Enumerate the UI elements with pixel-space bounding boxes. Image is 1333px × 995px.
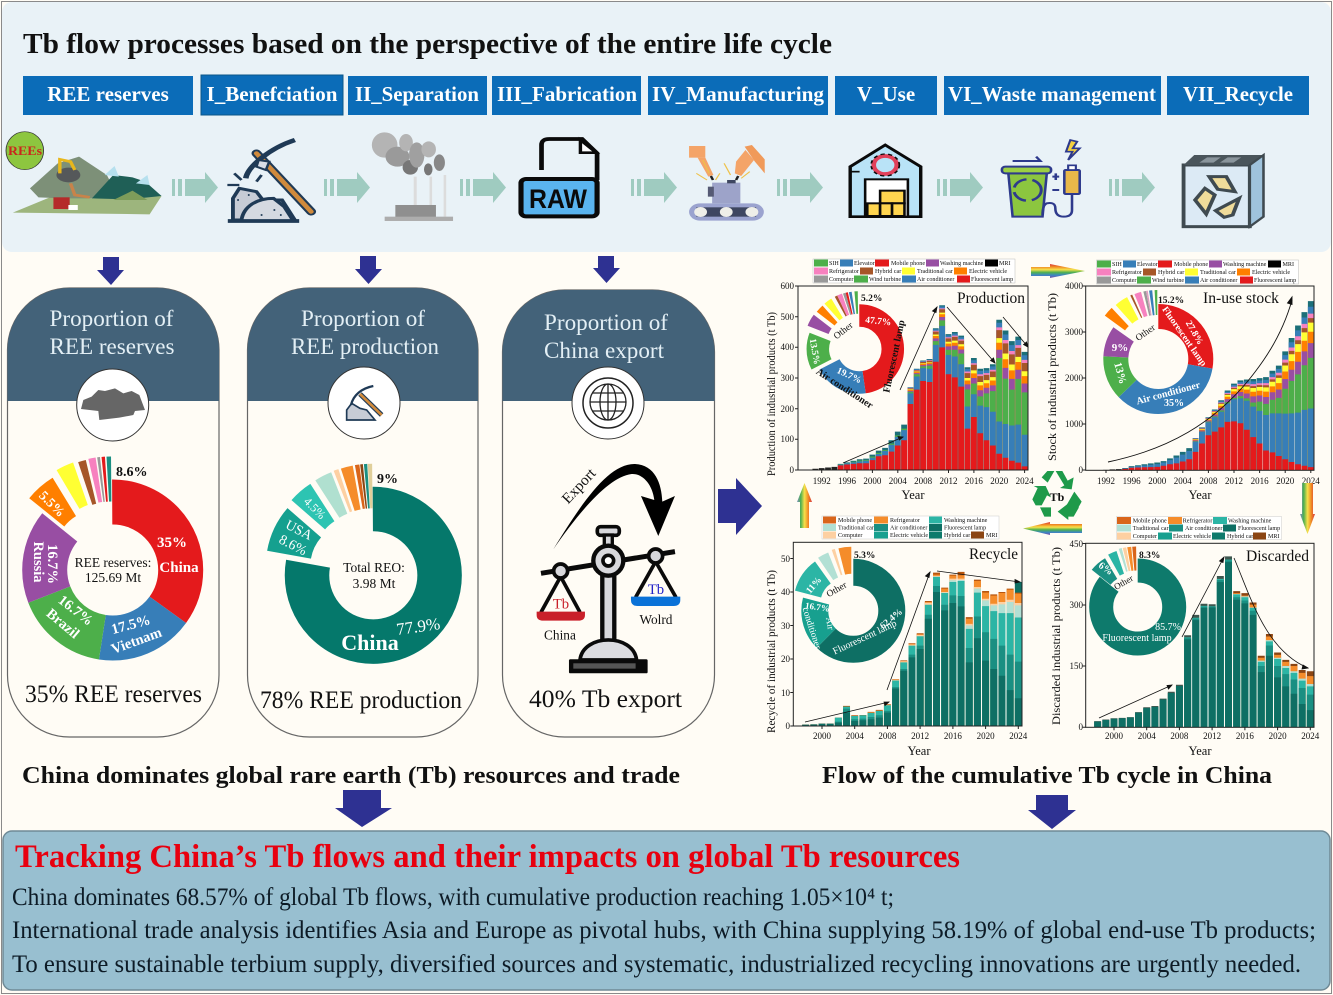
summary lines: China dominates 68.57% of global Tb flows, with cumulative production reaching 1.05×10⁴ t; <box>12 884 894 911</box>
donut labels: reserves: 16.7% <box>44 544 60 584</box>
axis labels: 30 <box>781 621 790 631</box>
donut labels: reserves: REE reserves: <box>75 555 151 570</box>
legend: Fluorescent lamp <box>1238 526 1280 532</box>
donut labels: 27.8% <box>1183 319 1205 347</box>
panel: proportion of REE production <box>248 288 478 737</box>
top band: life cycle flow <box>2 2 1331 252</box>
legend: Traditional car <box>1200 270 1236 276</box>
axis labels: 2016 <box>944 731 962 741</box>
legend: Air conditioner <box>1185 526 1222 532</box>
legend <box>813 259 1015 283</box>
stage labels: I_Benefciation <box>206 82 338 106</box>
axes <box>795 286 1028 473</box>
legend: Fluorescent lamp <box>1254 278 1296 284</box>
axis labels: Year <box>901 488 925 502</box>
legend: Computer <box>1112 278 1136 284</box>
chart: in-use stock <box>1045 260 1320 502</box>
stage labels: III_Fabrication <box>497 82 637 106</box>
stage labels: V_Use <box>857 82 915 106</box>
panel: proportion of China export: China export <box>544 338 665 363</box>
stacked bars <box>1106 301 1311 470</box>
axis labels: 2016 <box>965 476 983 486</box>
legend: MRI <box>1282 262 1294 268</box>
large right arrow <box>718 478 762 535</box>
donut labels: 8.3% <box>1139 551 1160 561</box>
legend: MRI <box>999 261 1011 267</box>
axis labels: Stock of industrial products (t Tb) <box>1045 293 1059 461</box>
donut labels: production: 77.9% <box>395 614 441 639</box>
legend: Fluorescent lamp <box>944 526 986 532</box>
axis labels: 20 <box>781 654 790 664</box>
donut labels: 5.2% <box>861 294 882 304</box>
down arrow to production panel <box>355 256 382 284</box>
donut labels: 47.7% <box>865 316 892 328</box>
flow arrows <box>172 172 1155 203</box>
rainbow arrow: recycle to production <box>797 483 812 528</box>
icon: mine and mountains: REEs <box>8 143 42 158</box>
donut labels: reserves: Brazil <box>43 606 82 642</box>
axis labels: 2012 <box>911 731 929 741</box>
icon: smokestacks <box>372 132 453 221</box>
axis labels: 2024 <box>1301 731 1320 741</box>
panel: proportion of REE reserves: Proportion of <box>50 306 174 331</box>
icon: mine and mountains <box>6 132 162 214</box>
donut chart: REE production <box>288 486 440 642</box>
stacked bars <box>815 305 1025 470</box>
donut labels: production: 8.6% <box>276 533 309 559</box>
donut labels: Fluorescent lamp <box>881 319 908 394</box>
export scale illustration: Export <box>559 465 600 507</box>
icon: warehouse <box>850 145 921 217</box>
title: Tb flow processes based on the perspective of the entire life cycle <box>23 29 832 60</box>
axis labels: 2000 <box>1105 731 1124 741</box>
export scale illustration: China <box>544 627 576 642</box>
stage labels: VII_Recycle <box>1183 82 1293 106</box>
axis labels: 2008 <box>1199 476 1218 486</box>
caption: 78% REE production: 78% REE production <box>260 685 462 714</box>
axis labels: Production <box>957 290 1025 307</box>
axis labels: 10 <box>781 688 790 698</box>
axis labels: 2004 <box>846 731 864 741</box>
export scale illustration: Tb <box>553 596 569 612</box>
legend: Hybrid car <box>875 269 901 275</box>
donut labels: Fluorescent lamp <box>1159 305 1208 369</box>
rainbow arrow: stock to discarded <box>1300 483 1315 534</box>
axis labels: 500 <box>780 312 794 322</box>
donut: in-use share <box>1107 302 1201 402</box>
legend: Mobile phone <box>1133 518 1167 524</box>
axis labels: 1000 <box>1065 419 1084 429</box>
legend <box>822 516 999 539</box>
panel: proportion of REE reserves <box>8 288 219 737</box>
donut labels: reserves: 16.7% <box>55 592 96 629</box>
axis labels: 1996 <box>1123 476 1141 486</box>
icon: ore circle <box>77 369 149 441</box>
donut labels: Other <box>1134 323 1158 344</box>
axis labels: Discarded industrial products (t Tb) <box>1049 547 1063 725</box>
down arrow right <box>1028 795 1076 829</box>
legend: Air conditioner <box>1200 278 1237 284</box>
donut labels: production: Total REO: <box>343 560 405 575</box>
axis labels: 2004 <box>1174 476 1192 486</box>
legend: MRI <box>1268 534 1280 540</box>
donut labels: reserves: 8.6% <box>116 465 148 480</box>
axis labels: 150 <box>1070 661 1084 671</box>
stacked bars <box>806 572 1018 726</box>
legend: Wind turbine <box>869 277 901 283</box>
legend: Electric vehicle <box>890 533 928 539</box>
axis labels: Year <box>907 744 931 758</box>
chart: recycle <box>764 516 1028 758</box>
axis labels: 100 <box>780 434 794 444</box>
down arrow to export panel <box>593 256 620 283</box>
axis labels: 2008 <box>878 731 897 741</box>
donut labels: Air <box>823 617 835 632</box>
legend: Traditional car <box>1133 526 1169 532</box>
axis labels: 300 <box>780 373 794 383</box>
heading: China dominates: China dominates global rare earth (Tb) resources and trade <box>22 762 680 789</box>
legend: SIH <box>1112 262 1122 268</box>
icon: recycling symbol with Tb <box>1032 471 1082 520</box>
axis labels: 0 <box>786 721 790 731</box>
summary heading: Tracking China’s Tb flows and their impacts on global Tb resources <box>15 839 960 875</box>
summary lines: To ensure sustainable terbium supply, diversified sources and systematic, industrialized recycling innovations are urgently needed. <box>12 951 1301 978</box>
axis labels: 2000 <box>813 731 832 741</box>
legend: Refrigerator <box>1183 518 1212 524</box>
axis labels: Recycle <box>969 546 1018 563</box>
donut labels: 13% <box>1111 361 1129 385</box>
donut labels: reserves: 17.5% <box>110 612 152 638</box>
legend: Refrigerator <box>1112 269 1142 276</box>
donut labels: production: 4.5% <box>301 494 329 522</box>
donut: production share <box>816 302 893 382</box>
axis labels: 1996 <box>838 476 856 486</box>
axis labels: 2016 <box>1251 476 1269 486</box>
axis labels: 200 <box>780 404 794 414</box>
axis labels: 2020 <box>977 731 995 741</box>
axis labels: Production of industrial products (t Tb) <box>764 312 778 476</box>
heading: flow of cycle: Flow of the cumulative Tb cycle in China <box>822 762 1272 789</box>
axis labels: Year <box>1188 488 1212 502</box>
donut labels: 9% <box>1112 342 1128 354</box>
axis labels <box>1049 539 1320 758</box>
donut labels: production: 9% <box>377 472 398 487</box>
axis labels: 2012 <box>1203 731 1221 741</box>
axis labels <box>1045 281 1320 502</box>
export scale illustration <box>537 464 680 673</box>
donut labels: reserves: 125.69 Mt <box>85 570 141 585</box>
legend: Electric vehicle <box>969 269 1007 275</box>
legend: Washing machine <box>1228 518 1272 524</box>
stage labels: II_Separation <box>355 82 479 106</box>
axis labels: 0 <box>790 465 794 475</box>
trend arrows <box>843 307 1028 463</box>
panel: proportion of REE production: Proportion of <box>301 306 425 331</box>
legend: Air conditioner <box>917 277 954 283</box>
axis labels: 450 <box>1070 539 1084 549</box>
down arrow to reserves panel <box>97 257 124 285</box>
axis labels: 2020 <box>1269 731 1287 741</box>
donut labels: Air conditioner <box>1135 380 1202 407</box>
panel: proportion of China export <box>502 290 714 737</box>
donut labels: production <box>276 472 441 655</box>
axis labels: 2020 <box>1276 476 1295 486</box>
legend: Refrigerator <box>829 268 859 275</box>
axis labels: 600 <box>780 281 794 291</box>
icon: robot manufacturing <box>689 145 765 221</box>
donut labels: 13.5% <box>807 338 821 365</box>
stage labels: IV_Manufacturing <box>652 82 824 106</box>
legend: Traditional car <box>838 526 874 532</box>
legend: Mobile phone <box>838 518 872 524</box>
legend: Mobile phone <box>1174 262 1208 268</box>
panel: summary <box>3 831 1330 990</box>
panel: proportion of REE reserves: REE reserves <box>50 334 175 359</box>
donut labels: production: China <box>341 630 399 655</box>
axis labels: 2000 <box>1148 476 1167 486</box>
axis labels: Discarded <box>1246 548 1309 565</box>
rainbow arrow: production to stock <box>1031 264 1085 278</box>
axis labels: 2012 <box>940 476 958 486</box>
axes <box>1083 286 1314 473</box>
donut labels: Other <box>832 320 856 342</box>
axis labels: 2012 <box>1225 476 1243 486</box>
icon: globe circle <box>572 367 644 439</box>
donut labels: 16.7% <box>804 600 830 614</box>
axis labels: 2024 <box>1302 476 1320 486</box>
legend: Hybrid car <box>1158 270 1184 276</box>
axis labels: 0 <box>1078 465 1084 475</box>
legend: Hybrid car <box>1227 534 1253 540</box>
legend: SIH <box>829 261 839 267</box>
legend: Electric vehicle <box>1252 270 1290 276</box>
stage labels <box>23 75 1309 115</box>
legend: Elevator <box>854 261 875 267</box>
axis labels: 400 <box>780 342 794 352</box>
axis labels: 2024 <box>1009 731 1028 741</box>
stage labels: REE reserves <box>47 82 169 106</box>
export scale illustration: Tb <box>648 582 664 598</box>
axis labels: Recycle of industrial products (t Tb) <box>764 570 778 733</box>
donut labels: reserves: China <box>159 560 199 576</box>
panel: proportion of REE production: REE production <box>291 334 439 359</box>
trend arrows <box>1099 557 1308 718</box>
donut labels: reserves: 35% <box>157 535 187 551</box>
axis labels: 2008 <box>914 476 933 486</box>
caption: 35% REE reserves: 35% REE reserves <box>25 679 202 708</box>
axis labels: 0 <box>1078 722 1084 732</box>
axis labels: In-use stock <box>1203 290 1279 307</box>
donut labels: 5.3% <box>854 551 875 561</box>
chart: discarded <box>1049 516 1320 758</box>
donut labels: Air conditioner <box>814 366 875 412</box>
donut labels: 85.7% <box>1155 622 1181 633</box>
stacked bars <box>1098 556 1310 727</box>
legend: Elevator <box>1137 262 1158 268</box>
legend: MRI <box>986 533 998 539</box>
axis labels: 40 <box>781 587 790 597</box>
axis labels: 2004 <box>889 476 907 486</box>
icon: recycling bin with battery <box>1002 140 1080 217</box>
axis labels: 2020 <box>990 476 1009 486</box>
axis labels: 300 <box>1070 600 1084 610</box>
legend <box>1096 260 1298 284</box>
export arrow <box>553 464 675 549</box>
donut labels: reserves: Vietnam <box>109 625 164 658</box>
legend <box>1116 516 1282 540</box>
legend: Electric vehicle <box>1173 534 1211 540</box>
axis labels: 50 <box>781 554 790 564</box>
axis labels: 2000 <box>863 476 882 486</box>
chart: production <box>764 259 1034 502</box>
donut labels: 62.4% <box>878 607 905 632</box>
donut labels: 15.2% <box>1158 296 1184 306</box>
donut labels: 35% <box>1164 398 1184 409</box>
legend: Computer <box>838 533 862 539</box>
icon: RAW file <box>521 139 597 216</box>
donut labels: Other <box>1112 573 1135 592</box>
donut labels: production: USA <box>283 518 315 544</box>
summary lines <box>12 884 1316 978</box>
caption: 40% Tb export: 40% Tb export <box>529 684 682 713</box>
legend: Hybrid car <box>944 533 970 539</box>
panel: proportion of China export: Proportion of <box>544 310 668 335</box>
icon: recycling symbol with Tb: Tb <box>1050 490 1065 504</box>
axis labels: 2016 <box>1236 731 1254 741</box>
axes <box>790 542 1022 729</box>
donut labels <box>799 551 905 657</box>
legend: Refrigerator <box>890 517 920 524</box>
axis labels: 1992 <box>813 476 831 486</box>
donut labels: reserves: Russia <box>30 541 46 583</box>
legend: Washing machine <box>1223 262 1267 268</box>
axis labels: 2004 <box>1138 731 1156 741</box>
donut: discarded share <box>1093 558 1174 644</box>
axis labels: 2000 <box>1065 373 1084 383</box>
axis labels <box>764 546 1028 758</box>
donut labels: Fluorescent lamp <box>1102 633 1172 644</box>
axis labels: 2024 <box>1016 476 1034 486</box>
icon: pickaxe on rock <box>227 140 311 221</box>
donut labels: 6% <box>1096 560 1115 578</box>
legend: Computer <box>829 277 853 283</box>
axis labels: 2008 <box>1170 731 1189 741</box>
rainbow arrow: discarded to recycle <box>1023 522 1082 535</box>
icon: recycle box <box>1184 155 1263 227</box>
stage labels: VI_Waste management <box>948 82 1156 106</box>
icon: pickaxe circle <box>328 367 400 439</box>
balance scale <box>537 527 680 673</box>
export scale illustration: Wolrd <box>639 612 673 627</box>
icon: RAW file: RAW <box>529 184 587 214</box>
axes <box>1083 543 1314 730</box>
donut labels: Fluorescent lamp <box>831 618 899 657</box>
axis labels <box>764 281 1034 502</box>
donut labels: production: 3.98 Mt <box>353 576 396 591</box>
legend: Washing machine <box>940 261 984 267</box>
donut labels <box>1111 296 1208 409</box>
donut labels: reserves: 5.5% <box>36 488 68 520</box>
donut labels: Other <box>825 580 850 600</box>
legend: Mobile phone <box>891 261 925 267</box>
donut labels <box>1096 551 1181 644</box>
donut labels <box>807 294 908 412</box>
down arrow left <box>335 790 392 827</box>
axis labels: 1992 <box>1097 476 1115 486</box>
donut labels: 19.7% <box>835 366 863 386</box>
axis labels: 3000 <box>1065 327 1084 337</box>
trend arrows <box>805 571 1020 722</box>
axis labels: Year <box>1188 744 1212 758</box>
legend: Traditional car <box>917 269 953 275</box>
legend: Fluorescent lamp <box>971 277 1013 283</box>
donut labels: 11% <box>805 575 824 596</box>
donut labels: conditioner <box>799 606 823 651</box>
legend: Washing machine <box>944 518 988 524</box>
trend curve <box>1108 297 1292 462</box>
legend: Air conditioner <box>890 526 927 532</box>
summary lines: International trade analysis identifies Asia and Europe as pivotal hubs, with China supplying 58.19% of global end-use Tb products; <box>12 917 1316 944</box>
legend: Computer <box>1133 534 1157 540</box>
legend: Wind turbine <box>1152 278 1184 284</box>
axis labels: 4000 <box>1065 281 1084 291</box>
donut chart: REE reserves <box>32 479 181 638</box>
donut labels: reserves <box>30 465 199 658</box>
donut: recycle share <box>807 560 892 649</box>
